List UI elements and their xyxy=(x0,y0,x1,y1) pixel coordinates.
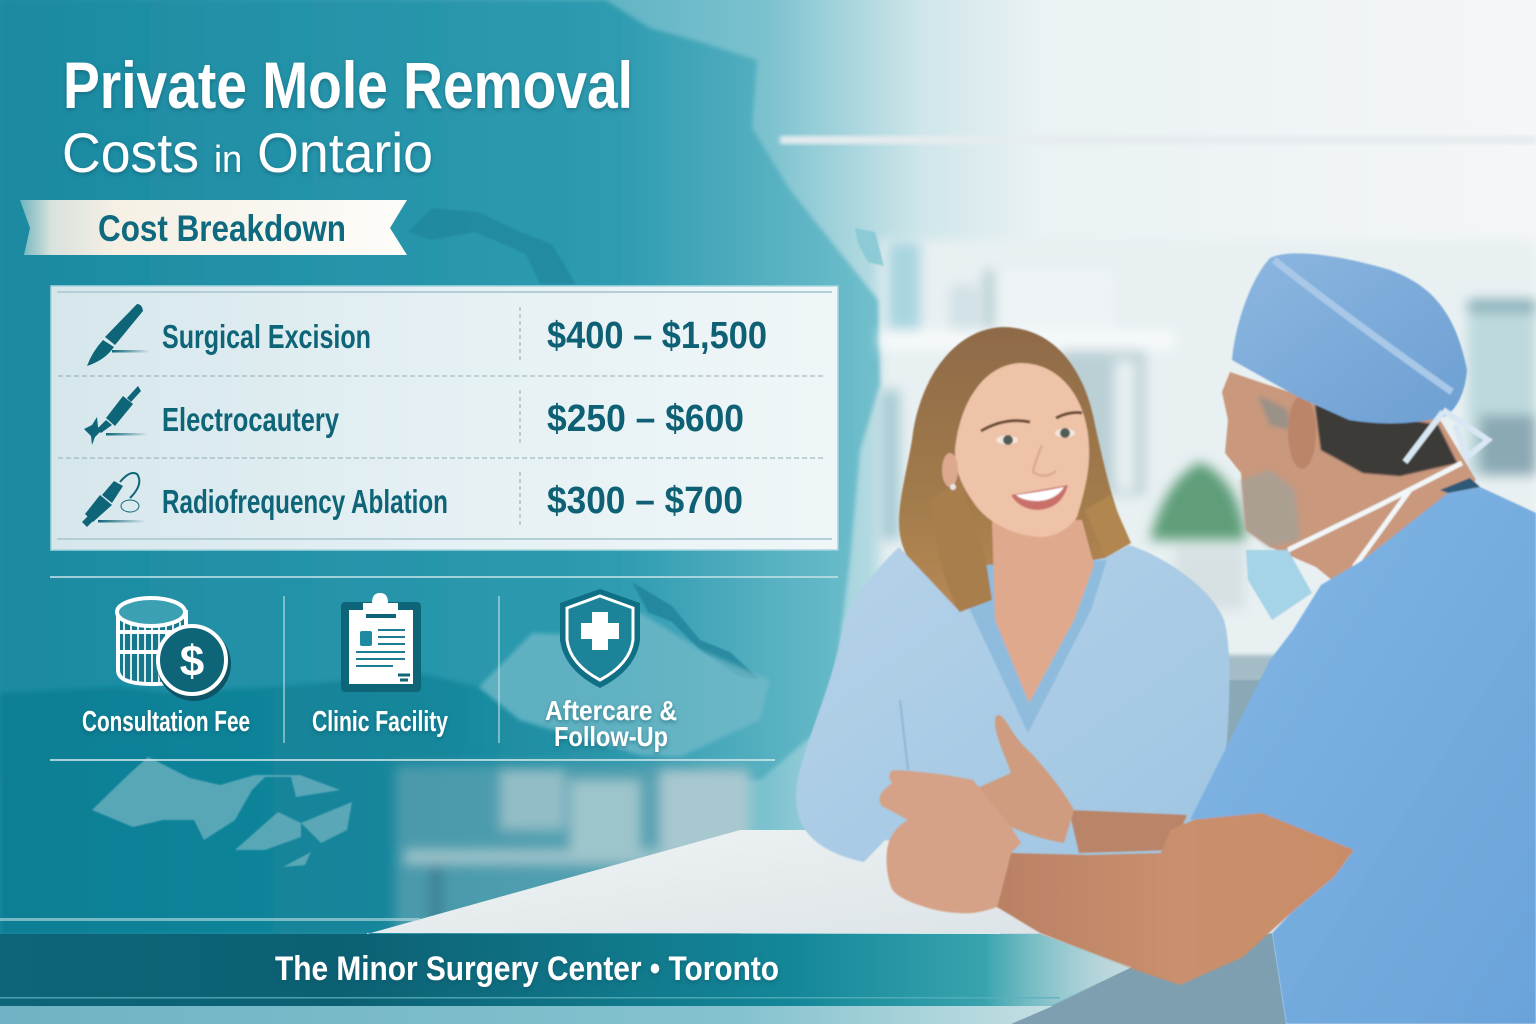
map of Ontario xyxy=(0,0,884,935)
included costs section xyxy=(50,577,838,760)
face xyxy=(955,363,1089,537)
island xyxy=(479,612,770,757)
icon: coins and dollar: $ xyxy=(180,637,204,686)
label: consultation fee: Consultation Fee xyxy=(82,706,250,738)
footer band: The Minor Surgery Center • Toronto xyxy=(275,950,779,988)
clinic background left xyxy=(395,765,750,935)
label: aftercare and follow-up: Follow-Up xyxy=(554,721,668,752)
near arm xyxy=(997,805,1354,985)
nose xyxy=(1033,445,1056,476)
near hand xyxy=(879,770,1021,913)
ribbon: cost breakdown xyxy=(20,200,407,255)
title: Costs in Ontario xyxy=(62,121,433,184)
row: surgical excision xyxy=(162,315,767,357)
eyebrows and eyes xyxy=(981,413,1082,431)
table xyxy=(367,830,1286,1024)
straps xyxy=(1288,463,1462,567)
mask xyxy=(1246,550,1312,620)
far forearm xyxy=(1069,810,1187,853)
ear xyxy=(1288,395,1316,469)
row: electrocautery: $250 – $600 xyxy=(547,398,744,440)
row: radiofrequency ablation xyxy=(162,480,743,522)
lakes upper xyxy=(408,208,576,284)
title: Private Mole Removal xyxy=(63,48,633,122)
cap ties xyxy=(1405,410,1488,462)
smile xyxy=(1011,485,1068,510)
hair back xyxy=(899,327,1131,612)
row: radiofrequency ablation: $300 – $700 xyxy=(547,480,743,522)
surgeon xyxy=(879,253,1536,1024)
label: aftercare and follow-up xyxy=(545,695,677,752)
clinic background right xyxy=(880,242,1536,750)
neck and head xyxy=(1222,372,1476,585)
row: surgical excision: $400 – $1,500 xyxy=(547,315,767,357)
beard xyxy=(1241,470,1300,547)
hair front left xyxy=(930,480,992,612)
neck xyxy=(992,520,1094,703)
V-neck band xyxy=(970,560,1107,733)
dark hair xyxy=(1315,405,1457,476)
row: radiofrequency ablation: Radiofrequency Ablation xyxy=(162,483,448,520)
open hand xyxy=(973,715,1074,843)
icon: shield xyxy=(560,589,640,688)
title xyxy=(62,48,633,184)
icon: clipboard xyxy=(341,593,421,692)
icon: coins and dollar xyxy=(117,598,231,701)
woman patient xyxy=(796,327,1230,862)
icon: scalpel xyxy=(87,304,150,366)
lake lower xyxy=(632,582,760,680)
row: electrocautery xyxy=(162,398,744,440)
icon: electrocautery xyxy=(84,386,148,445)
label: aftercare and follow-up: Aftercare & xyxy=(545,695,677,726)
dark lower region xyxy=(0,673,740,935)
icon: radiofrequency probe xyxy=(82,473,146,527)
row: electrocautery: Electrocautery xyxy=(162,401,339,438)
ribbon: cost breakdown: Cost Breakdown xyxy=(98,208,346,249)
row: surgical excision: Surgical Excision xyxy=(162,318,371,355)
surgical cap xyxy=(1232,253,1467,423)
scrub top xyxy=(1190,487,1536,1024)
panel: cost table xyxy=(51,286,838,550)
sweater xyxy=(796,545,1230,862)
map islands bottom left xyxy=(92,757,352,867)
label: clinic facility: Clinic Facility xyxy=(312,706,448,738)
footer band xyxy=(0,918,1132,1024)
